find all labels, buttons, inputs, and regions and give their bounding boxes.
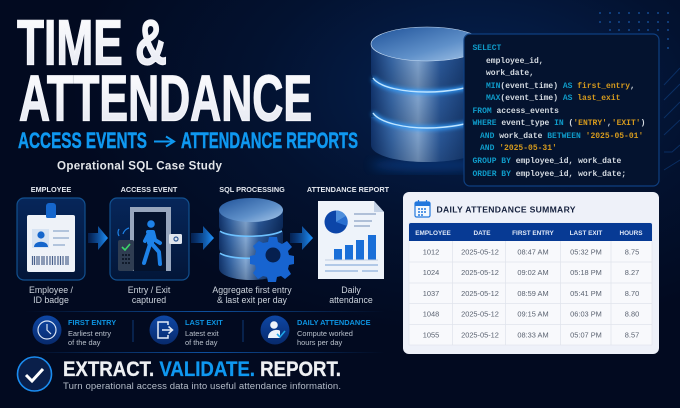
feature: daily attendance: Compute worked — [297, 329, 353, 338]
step labels: ATTENDANCE REPORT — [307, 185, 390, 194]
attendance table: 8.75 — [625, 248, 639, 256]
slogan — [63, 358, 341, 392]
attendance table: 2025-05-12 — [461, 310, 499, 318]
arrow — [191, 226, 214, 250]
attendance table: FIRST ENTRY — [512, 230, 555, 237]
attendance table: EMPLOYEE — [415, 230, 451, 237]
attendance table: 2025-05-12 — [461, 289, 499, 298]
panel: access event door — [110, 198, 189, 280]
attendance table: DATE — [474, 230, 491, 237]
code text: ORDER BY employee_id, work_date; — [472, 170, 626, 179]
step captions: attendance — [329, 295, 373, 305]
attendance table: 08:47 AM — [517, 248, 549, 256]
attendance table: 8.70 — [625, 289, 639, 298]
attendance table: 08:33 AM — [517, 330, 549, 340]
code text: employee_id, — [486, 57, 544, 66]
icon: large database — [371, 27, 483, 172]
attendance table: 8.57 — [625, 330, 639, 340]
icon: SQL processing database with gear — [219, 198, 294, 282]
code text: WHERE event_type IN ('ENTRY','EXIT') — [472, 119, 645, 128]
step captions — [29, 285, 373, 305]
slogan: Turn operational access data into useful attendance information. — [63, 381, 341, 392]
attendance table: 05:18 PM — [570, 268, 602, 277]
code text: AND '2025-05-31' — [480, 144, 557, 153]
subtitle: access events to attendance reports — [18, 128, 358, 153]
attendance table: 8.80 — [625, 310, 639, 318]
step labels: EMPLOYEE — [31, 185, 71, 194]
attendance table: 08:59 AM — [517, 289, 549, 298]
code text: SELECT — [472, 44, 502, 53]
feature: last exit: Latest exit — [185, 329, 219, 338]
attendance table: 1048 — [423, 310, 439, 318]
attendance table: 06:03 PM — [570, 310, 602, 318]
tagline: operational SQL case study: Operational SQL Case Study — [57, 160, 223, 172]
attendance table: LAST EXIT — [570, 230, 602, 237]
background dot pattern — [599, 12, 669, 49]
feature: last exit: of the day — [185, 338, 218, 347]
feature: daily attendance: hours per day — [297, 338, 342, 347]
panel: employee badge — [17, 198, 85, 280]
feature: first entry: of the day — [68, 338, 101, 347]
code text: GROUP BY employee_id, work_date — [472, 157, 622, 166]
feature: first entry — [32, 316, 116, 347]
arrow — [88, 226, 108, 250]
attendance table — [409, 223, 652, 345]
attendance table: 05:07 PM — [570, 330, 602, 340]
attendance table: 09:02 AM — [517, 268, 549, 277]
code text — [472, 44, 645, 179]
step captions: Aggregate first entry — [212, 285, 292, 295]
panel: SQL code — [464, 34, 659, 186]
feature: daily attendance — [260, 316, 371, 347]
icon: calendar — [415, 200, 430, 217]
feature: daily attendance: DAILY ATTENDANCE — [297, 318, 371, 327]
icon: check badge — [18, 357, 52, 391]
title: ATTENDANCE — [19, 62, 312, 134]
attendance table: 05:41 PM — [570, 289, 602, 298]
feature: last exit: LAST EXIT — [185, 318, 223, 327]
code text: MIN(event_time) AS first_entry, — [486, 82, 635, 91]
feature: first entry: FIRST ENTRY — [68, 318, 116, 327]
subtitle: access events to attendance reports: ATTENDANCE REPORTS — [181, 128, 358, 153]
code text: AND work_date BETWEEN '2025-05-01' — [480, 132, 643, 141]
feature: last exit — [150, 316, 223, 347]
icon: attendance report document — [318, 201, 384, 279]
code text: MAX(event_time) AS last_exit — [486, 94, 621, 103]
table title: DAILY ATTENDANCE SUMMARY — [436, 204, 576, 214]
feature: first entry: Earliest entry — [68, 329, 111, 338]
attendance table: HOURS — [619, 230, 643, 237]
panel: daily attendance summary — [403, 192, 659, 354]
step labels: ACCESS EVENT — [121, 185, 178, 194]
step captions: Employee / — [29, 285, 74, 295]
attendance table: 05:32 PM — [570, 248, 602, 256]
step captions: captured — [132, 295, 166, 305]
attendance table: 8.27 — [625, 268, 639, 277]
slogan: EXTRACT. VALIDATE. REPORT. — [63, 358, 341, 381]
attendance table: 2025-05-12 — [461, 330, 499, 340]
title — [17, 6, 312, 134]
attendance table: 2025-05-12 — [461, 268, 499, 277]
step captions: Entry / Exit — [128, 285, 171, 295]
title: TIME & — [17, 6, 167, 78]
attendance table: 2025-05-12 — [461, 248, 499, 256]
attendance table: 1024 — [423, 268, 439, 277]
code text: work_date, — [486, 69, 534, 78]
step labels: SQL PROCESSING — [219, 185, 285, 194]
arrow — [290, 226, 313, 250]
attendance table: 1012 — [423, 248, 439, 256]
step labels — [31, 185, 390, 194]
step captions: ID badge — [33, 295, 69, 305]
attendance table: 1037 — [423, 289, 439, 298]
code text: FROM access_events — [472, 107, 559, 116]
attendance table: 09:15 AM — [517, 310, 549, 318]
subtitle: access events to attendance reports: ACCESS EVENTS — [18, 128, 147, 153]
step captions: & last exit per day — [217, 295, 288, 305]
attendance table: 1055 — [423, 330, 439, 340]
step captions: Daily — [341, 285, 361, 295]
